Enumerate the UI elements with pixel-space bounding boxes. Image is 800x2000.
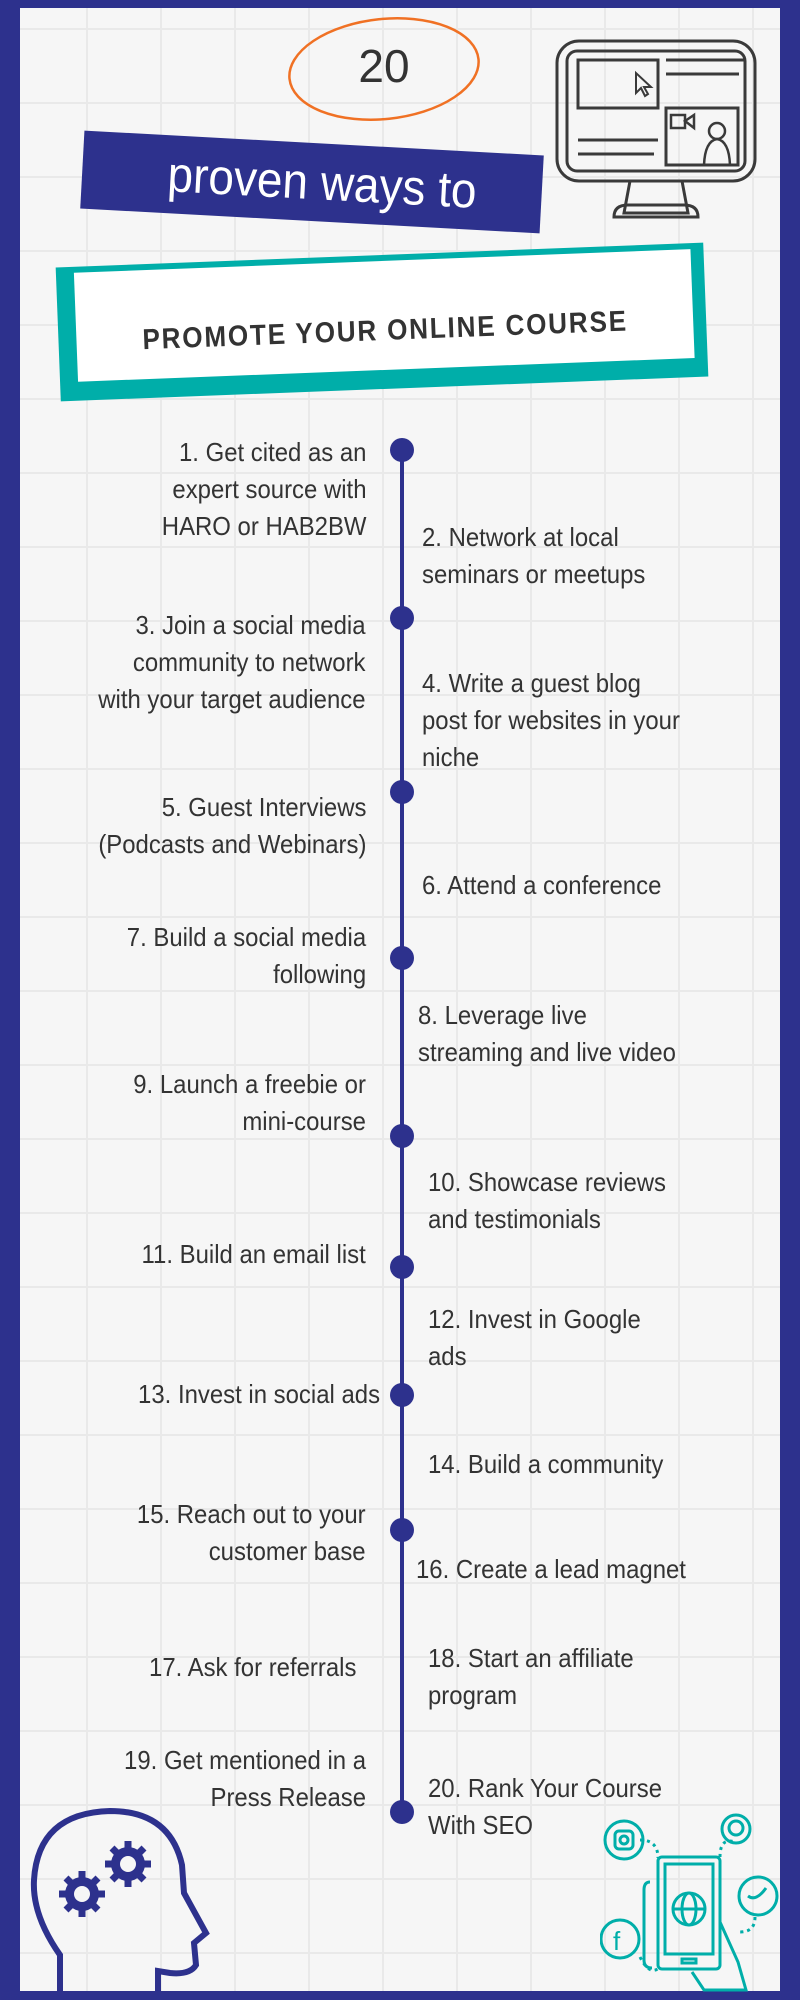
item 1: HARO or HAB2BW [161,511,366,541]
item 9: 9. Launch a freebie or [133,1069,366,1099]
item 20: 20. Rank Your Course [428,1773,662,1803]
item 7: 7. Build a social media [127,922,366,952]
item 2: seminars or meetups [422,559,645,589]
item 18 [428,1643,634,1710]
item 3: 3. Join a social media [136,610,366,640]
item 4 [422,668,680,772]
item 4: post for websites in your [422,705,680,735]
item 3: with your target audience [99,684,366,714]
timeline [390,438,414,1824]
item 7: following [273,959,366,989]
item 13: 13. Invest in social ads [138,1379,380,1409]
item 20: With SEO [428,1810,533,1840]
title text: PROMOTE YOUR ONLINE COURSE [142,306,628,356]
item 1 [161,437,366,541]
item 16: 16. Create a lead magnet [416,1554,686,1584]
icon: phone with social media: f [613,1926,621,1956]
item 5 [98,792,366,859]
item 4: 4. Write a guest blog [422,668,641,698]
item 15 [137,1499,366,1566]
item 1: 1. Get cited as an [179,437,366,467]
item 10: 10. Showcase reviews [428,1167,666,1197]
item 8: streaming and live video [418,1037,676,1067]
item 7 [127,922,366,989]
item 12 [428,1304,641,1371]
item 8 [418,1000,676,1067]
item 15: 15. Reach out to your [137,1499,366,1529]
orange circle with number [288,17,480,121]
item 9 [133,1069,366,1136]
item 5: (Podcasts and Webinars) [98,829,366,859]
item 4: niche [422,742,479,772]
item 3 [98,610,366,714]
icon: head with gears [30,1808,210,1991]
item 17: 17. Ask for referrals [149,1652,356,1682]
item 14: 14. Build a community [428,1449,663,1479]
item 19 [124,1745,366,1812]
item 10 [428,1167,666,1234]
item 20 [428,1773,662,1840]
item 3: community to network [133,647,366,677]
blue banner: proven ways to: proven ways to [166,146,478,219]
item 18: program [428,1680,517,1710]
item 6: 6. Attend a conference [422,870,661,900]
item 9: mini-course [242,1106,366,1136]
item 19: Press Release [210,1782,366,1812]
number 20: 20 [358,40,410,92]
item 1: expert source with [172,474,366,504]
item 12: ads [428,1341,467,1371]
teal title box [56,243,708,401]
item 12: 12. Invest in Google [428,1304,641,1334]
item 11: 11. Build an email list [142,1239,366,1269]
item 2: 2. Network at local [422,522,619,552]
item 10: and testimonials [428,1204,601,1234]
blue banner: proven ways to [80,131,544,233]
item 8: 8. Leverage live [418,1000,587,1030]
item 5: 5. Guest Interviews [161,792,366,822]
item 2 [422,522,645,589]
icon: computer monitor [556,40,756,218]
title text [74,249,695,382]
item 15: customer base [209,1536,366,1566]
item 19: 19. Get mentioned in a [124,1745,366,1775]
icon: phone with social media [600,1814,778,1992]
item 18: 18. Start an affiliate [428,1643,634,1673]
